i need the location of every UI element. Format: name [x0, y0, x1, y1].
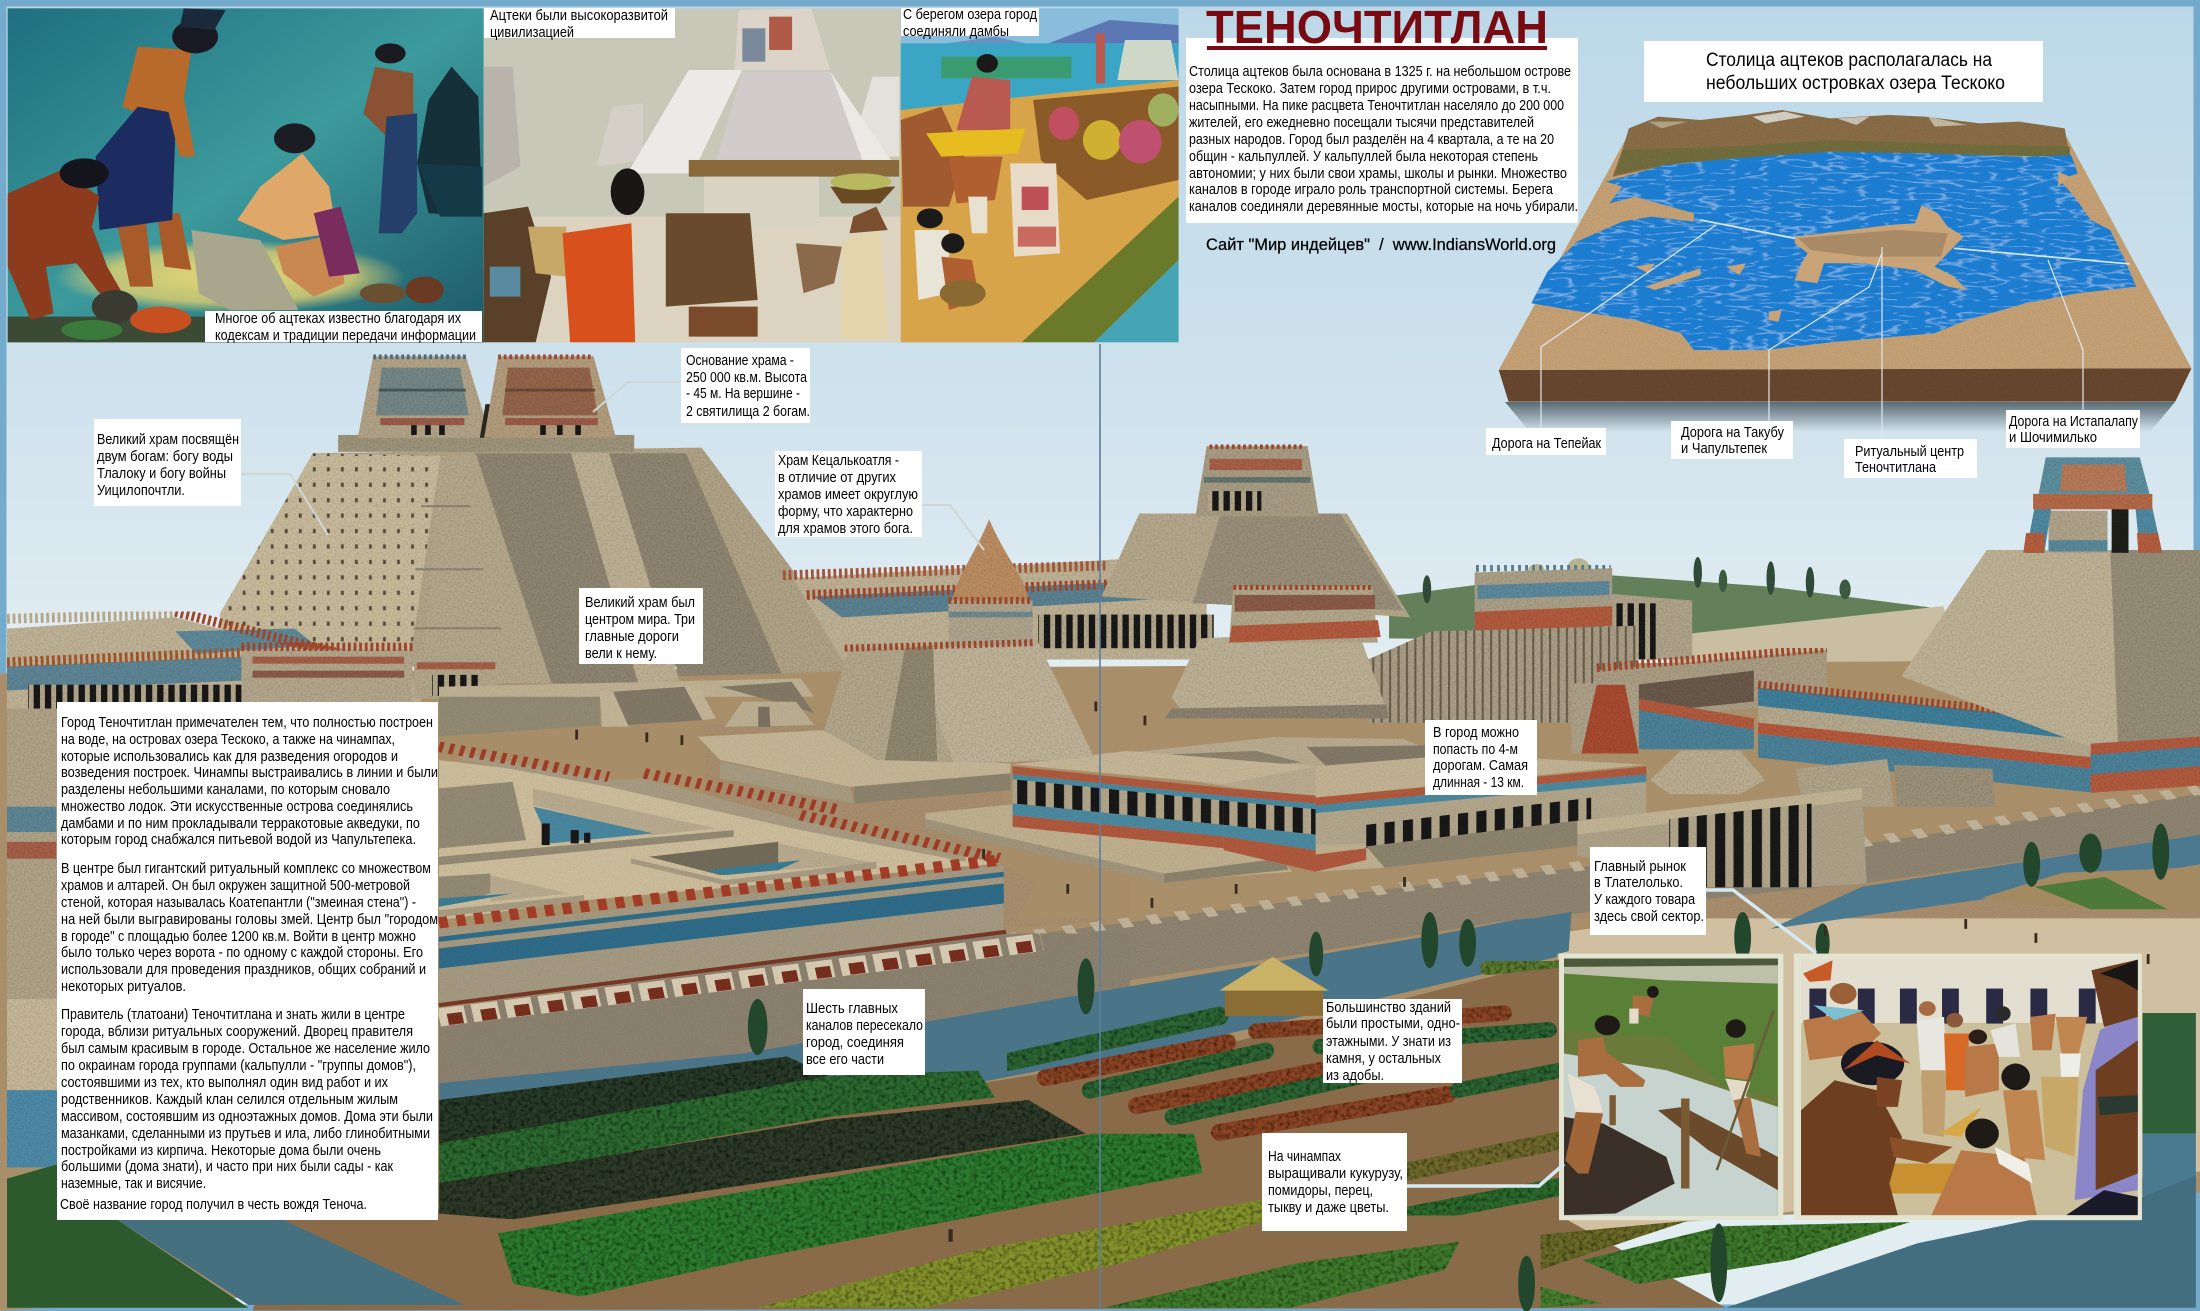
canal between wall and gardens [439, 912, 1571, 1122]
causeways [1700, 220, 2130, 264]
ground plaza [0, 659, 2200, 1310]
hut [1219, 957, 1329, 1016]
callout: chinampa crops: На чинампах [1268, 1149, 1342, 1165]
text panel: about the city: храмов и алтарей. Он был окружен защитной 500-метровой [61, 878, 410, 894]
colonnade front [1316, 766, 1646, 805]
text panel: city intro: жителей, его ежедневно посещали тысячи представителей [1189, 115, 1534, 131]
illustration: panorama of the city [0, 355, 2200, 1311]
vertical seam line [1099, 344, 1101, 1308]
tower left [358, 356, 491, 438]
callout: main market: Главный рынок [1594, 859, 1687, 875]
map label: ritual centre: Теночтитлана [1855, 460, 1937, 476]
text panel: about the city: использовали для проведения праздников, общих собраний и [61, 962, 426, 978]
text panel: about the city [57, 702, 438, 1220]
text panel: city intro: автономии; у них были свои храмы, школы и рынки. Множество [1189, 166, 1567, 182]
map label: Iztapalapa road [2006, 410, 2140, 448]
callout: Quetzalcoatl temple: в отличие от других [778, 470, 897, 486]
text panel: about the city: на воде, на островах озера Тескоко, а также на чинампах, [61, 732, 395, 748]
map label: Tacuba road: и Чапультепек [1681, 441, 1768, 457]
water bottom left and bottom right [7, 1165, 2196, 1308]
map label: ritual centre: Ритуальный центр [1855, 444, 1964, 460]
vegetable rows on chinampas [1007, 961, 1559, 1215]
callout: centre of the world: центром мира. Три [585, 612, 695, 628]
long blue and red building [1571, 648, 2095, 793]
block A [1013, 766, 1224, 796]
stepped pyramid [1109, 737, 1504, 798]
small altar [725, 702, 814, 727]
temple base wall [439, 690, 600, 737]
lower field rows [758, 1200, 1910, 1308]
lake water [1531, 152, 2136, 350]
caption: codices: Многое об ацтеках известно благодаря их [215, 311, 462, 327]
text panel: about the city: родственников. Каждый клан селился отдельным жилым [61, 1092, 398, 1108]
text panel: about the city: дамбами и по ним прокладывали терракотовые акведуки, по [61, 816, 420, 832]
callout: simple buildings: этажными. У знати из [1326, 1034, 1451, 1050]
text panel: about the city: В центре был гигантский ритуальный комплекс со множеством [61, 861, 431, 877]
image: causeway procession [901, 8, 1179, 342]
city island [1635, 172, 2070, 322]
callout: four roads: длинная - 13 км. [1433, 775, 1524, 791]
text panel: about the city: некоторых ритуалов. [61, 979, 186, 995]
right plaza sand [1557, 849, 2200, 1235]
wall to right [760, 794, 2200, 1031]
pool 2 [649, 842, 778, 875]
callout: four roads: дорогам. Самая [1433, 758, 1528, 774]
pool 1 [439, 782, 526, 848]
text panel: city intro: Столица ацтеков была основана в 1325 г. на небольшом острове [1189, 64, 1571, 80]
callout: four roads: В город можно [1433, 725, 1519, 741]
caption: civilization: Ацтеки были высокоразвитой [490, 8, 668, 24]
building with palisade [1368, 565, 1692, 723]
block B [1224, 788, 1316, 803]
large maize rows [439, 1057, 1202, 1296]
round Quetzalcoatl temple [814, 519, 1094, 765]
callout: Quetzalcoatl temple: Храм Кецалькоатля - [778, 453, 899, 469]
people on the plaza [575, 702, 2150, 1242]
callout: temple base: Основание храма - [686, 353, 794, 369]
image: Aztec scribes [8, 8, 484, 342]
callout: centre of the world: главные дороги [585, 629, 679, 645]
central palace and city wall [705, 724, 2200, 1031]
website credit: Сайт "Мир индейцев" / www.IndiansWorld.org [1206, 235, 1556, 254]
round temple forecourt sand [705, 724, 2200, 942]
text panel: about the city: по окраинам города группами (кальпулли - "группы домов"), [61, 1058, 416, 1074]
text panel: about the city: Правитель (тлатоани) Теночтитлана и знать жили в центре [61, 1007, 405, 1023]
map label: Tepeyac road [1486, 428, 1606, 455]
callout: two gods: Тлалоку и богу войны [97, 466, 226, 482]
image: chinampa farmers [1559, 954, 1783, 1220]
callout: Quetzalcoatl temple [775, 451, 984, 550]
callout: centre of the world: вели к нему. [585, 646, 657, 662]
caption: causeways: С берегом озера город [903, 7, 1037, 23]
image: market at Tlatelolco [1794, 954, 2142, 1220]
text panel: about the city: возведения построек. Чинампы выстраивались в линии и были [61, 765, 438, 781]
distant green fields [1389, 557, 1964, 688]
text panel: about the city: Своё название город получил в честь вождя Теноча. [60, 1197, 367, 1213]
text panel: city intro [1186, 38, 1578, 223]
map slab [1499, 110, 2192, 402]
caption: civilization: цивилизацией [490, 25, 574, 41]
text panel: about the city: наземные, так и висячие. [61, 1176, 206, 1192]
caption: civilization [484, 8, 675, 41]
callout: temple base: - 45 м. На вершине - [686, 386, 800, 402]
caption: codices: кодексам и традиции передачи информации [215, 328, 476, 344]
text panel: city intro: каналов в городе играло роль транспортной системы. Берега [1189, 182, 1554, 198]
callout: main market: здесь свой сектор. [1594, 909, 1704, 925]
callout: simple buildings: Большинство зданий [1326, 1000, 1451, 1016]
tower right [480, 404, 502, 438]
text panel: about the city: мазанками, сделанными из прутьев и ила, либо глинобитными [61, 1126, 430, 1142]
temple forecourt platform [698, 730, 1010, 787]
map heading: небольших островках озера Тескоко [1706, 73, 2005, 94]
text panel: about the city: в городе" с площадью более 1200 кв.м. Войти в центр можно [61, 929, 416, 945]
callout: six canals: все его части [806, 1052, 884, 1068]
text panel: about the city: стеной, которая называлась Коатепантли ("змеиная стена") - [61, 895, 416, 911]
gatehouse [1577, 788, 1867, 887]
caption: causeways [901, 7, 1039, 40]
callout: Quetzalcoatl temple: для храмов этого бога. [778, 521, 913, 537]
text panel: about the city: было только через ворота - по одному с каждой стороны. Его [61, 945, 423, 961]
callout: chinampa crops: выращивали кукурузу, [1268, 1166, 1403, 1182]
callout: main market: в Тлателолько. [1594, 875, 1683, 891]
callout: simple buildings [1323, 999, 1462, 1084]
map: lake Texcoco relief block [1499, 110, 2192, 440]
callout: six canals [803, 989, 925, 1075]
callout: temple base: 2 святилища 2 богам. [686, 404, 810, 420]
red spike lines [439, 747, 609, 777]
text panel: city intro: насыпными. На пике расцвета Теночтитлан населяло до 200 000 [1189, 98, 1564, 114]
callout: main market [1590, 847, 1816, 953]
map heading [1644, 41, 2043, 102]
temple 3: red striped [1165, 585, 1389, 718]
map label: ritual centre [1844, 439, 1977, 478]
callout: two gods: Великий храм посвящён [97, 432, 239, 448]
callout: six canals: каналов пересекало [806, 1018, 923, 1034]
text panel: about the city: города, вблизи ритуальных сооружений. Дворец правителя [61, 1024, 413, 1040]
map leader lines [1541, 225, 2083, 440]
map label: Tepeyac road: Дорога на Тепейак [1492, 436, 1602, 452]
callout: Quetzalcoatl temple: форму, что характерно [778, 504, 913, 520]
map label: Tacuba road: Дорога на Такубу [1681, 425, 1785, 441]
caption: codices [205, 311, 482, 344]
caption: causeways: соединяли дамбы [903, 24, 1009, 40]
map label: Iztapalapa road: и Шочимилько [2009, 430, 2097, 446]
callout: chinampa crops: тыкву и даже цветы. [1268, 1200, 1389, 1216]
text panel: about the city: которым город снабжался питьевой водой из Чапультепека. [61, 832, 416, 848]
callout: four roads: попасть по 4-м [1433, 742, 1518, 758]
text panel: about the city: массивом, состоявшим из одноэтажных домов. Дома эти были [61, 1109, 433, 1125]
text panel: about the city: разделены небольшими каналами, по которым сновало [61, 782, 390, 798]
callout: temple base: 250 000 кв.м. Высота [686, 370, 808, 386]
pool 3 [439, 873, 490, 907]
map shadow [1505, 402, 2175, 432]
left compound with red spikes [7, 612, 498, 730]
text panel: about the city: был самым красивым в городе. Остальное же население жило [61, 1041, 430, 1057]
callout: main market: У каждого товара [1594, 892, 1696, 908]
text panel: about the city: Город Теночтитлан примечателен тем, что полностью построен [61, 715, 433, 731]
callout: six canals: город, соединяя [806, 1035, 904, 1051]
callout: simple buildings: были простыми, одно- [1326, 1016, 1460, 1032]
trees [748, 824, 2169, 1311]
text panel: about the city: большими (дома знати), и часто при них были сады - как [61, 1159, 394, 1175]
plaza, terraces, pools and blue banded wall [439, 678, 1130, 1085]
canal water behind wall [439, 909, 1571, 1122]
text panel: about the city: состоявшими из тех, кто выполнял один вид работ и их [61, 1075, 389, 1091]
map label: Tacuba road [1671, 421, 1793, 459]
terrace [439, 760, 999, 920]
callout: centre of the world: Великий храм был [585, 595, 695, 611]
right canal and garden [1771, 835, 2200, 1197]
text panel: city intro: разных народов. Город был разделён на 4 квартала, а те на 20 [1189, 132, 1554, 148]
title: ТЕНОЧТИТЛАН [1206, 1, 1548, 53]
text panel: about the city: постройками из кирпича. Некоторые дома были очень [61, 1143, 381, 1159]
callout: Quetzalcoatl temple: храмов имеет округлую [778, 487, 918, 503]
main pyramid: Templo Mayor [217, 355, 859, 683]
callout: four roads [1425, 720, 1537, 795]
roof [1013, 751, 1316, 784]
temple 2: back stepped pyramid [1101, 445, 1410, 617]
callout: six canals: Шесть главных [806, 1001, 899, 1017]
callout: two gods [94, 419, 328, 535]
text panel: about the city: множество лодок. Эти искусственные острова соединялись [61, 799, 413, 815]
callout: temple base [593, 348, 810, 423]
small shrine and stone blocks [1650, 751, 1995, 807]
callout: chinampa crops: помидоры, перец, [1268, 1183, 1373, 1199]
callout: two gods: двум богам: богу воды [97, 449, 233, 465]
callout: centre of the world [579, 588, 703, 664]
panel: top images [8, 8, 1179, 342]
map heading: Столица ацтеков располагалась на [1706, 50, 1992, 71]
image: market below white pyramid [484, 8, 901, 342]
callout: simple buildings: камня, у остальных [1326, 1051, 1442, 1067]
text panel: city intro: озера Тескоко. Затем город прирос другими островами, в т.ч. [1189, 81, 1551, 97]
callout: two gods: Уицилопочтли. [97, 483, 185, 499]
text panel: city intro: общин - кальпуллей. У кальпуллей была некоторая степень [1189, 149, 1538, 165]
wall with blue bands [439, 865, 1004, 1005]
text panel: about the city: которые использовались как для разведения огородов и [61, 749, 398, 765]
plaza ground [439, 717, 1130, 937]
left edge blocks [7, 709, 63, 1167]
text panel: about the city: на ней были выгравированы головы змей. Центр был "городом [61, 912, 438, 928]
back compound behind round temple [783, 554, 1214, 659]
callout: chinampa crops [1262, 1133, 1564, 1231]
callout: simple buildings: из адобы. [1326, 1068, 1384, 1084]
platform [925, 803, 1293, 881]
garden earth [253, 957, 1726, 1310]
crenellated lower wall [439, 933, 1130, 1085]
right pyramid with tower [1901, 457, 2200, 793]
text panel: city intro: каналов соединяли деревянные мосты, которые на ночь убирали. [1189, 199, 1578, 215]
map label: Iztapalapa road: Дорога на Истапалапу [2009, 414, 2139, 430]
